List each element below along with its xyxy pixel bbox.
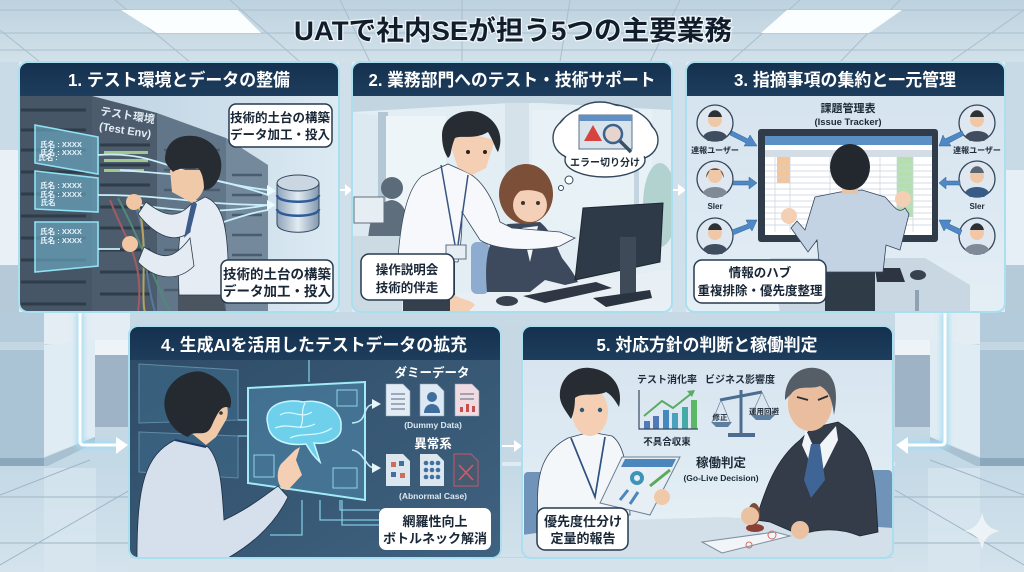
connector: arrow panel 4 to panel 5	[501, 440, 522, 452]
heading	[352, 62, 672, 96]
icon: database	[277, 175, 319, 232]
connector: arrow panel 1 to panel 4	[80, 312, 128, 454]
heading: 2. 業務部門へのテスト・技術サポート	[368, 70, 656, 90]
seated colleague	[471, 164, 578, 294]
go-live decision label: 稼働判定	[696, 455, 746, 470]
callout: 重複排除・優先度整理	[697, 283, 823, 298]
reporter labels: 連報ユーザー	[953, 145, 1001, 155]
server racks	[19, 96, 268, 312]
heading	[19, 62, 339, 96]
callout: 情報のハブ	[729, 265, 792, 280]
panel: 1 test environment and data preparation: 氏名 : XXXX	[40, 139, 82, 149]
label: test env	[100, 106, 155, 140]
issue tracker label: 課題管理表	[820, 101, 876, 115]
dummy data icons: ダミーデータ	[394, 365, 470, 380]
heading: 3. 指摘事項の集約と一元管理	[734, 70, 956, 90]
heading	[129, 326, 501, 360]
report	[600, 457, 680, 515]
panel: 5 response policy and go-live decision	[522, 326, 893, 558]
callout: 定量的報告	[550, 531, 616, 546]
holographic brain panel	[248, 382, 365, 500]
panel: 1 test environment and data preparation	[19, 62, 339, 312]
callout: ボトルネック解消	[383, 531, 487, 546]
icon: error window	[579, 115, 632, 152]
scale: business impact: 修正	[712, 412, 728, 422]
thought bubble: error triage: エラー切り分け	[570, 156, 640, 169]
panel: 1 test environment and data preparation: 氏名 : XXXX	[40, 189, 82, 199]
chart: test progress and defect convergence: テスト消化率	[637, 373, 697, 386]
decision document	[702, 531, 790, 553]
panel: 3 issue consolidation	[686, 62, 1005, 314]
callout: 操作説明会	[376, 262, 439, 277]
callout	[537, 508, 628, 550]
heading: 1. テスト環境とデータの整備	[68, 70, 290, 90]
executive figure with stamp	[741, 368, 878, 539]
panel: 1 test environment and data preparation: 氏名 :	[38, 152, 58, 162]
panel: 1 test environment and data preparation: 氏名 : XXXX	[40, 235, 82, 245]
code windows	[139, 364, 238, 478]
heading	[686, 62, 1005, 96]
panel: 2 test and technical support	[352, 62, 677, 316]
chart: test progress and defect convergence	[637, 373, 698, 448]
dummy data icons: (Dummy Data)	[404, 420, 462, 430]
go-live decision label: (Go-Live Decision)	[683, 473, 759, 483]
arrows to outputs	[352, 404, 375, 468]
icon: reporter avatars with arrows	[697, 105, 995, 254]
thought bubble: error triage	[553, 102, 658, 190]
heading: 5. 対応方針の判断と稼働判定	[596, 335, 818, 355]
connector: arrow panel 1 to panel 2	[339, 184, 352, 196]
issue tracker label	[815, 102, 882, 127]
callout: 網羅性向上	[402, 514, 468, 529]
abnormal case icons: 異常系	[414, 436, 452, 451]
panel: 1 test environment and data preparation: 氏名 : XXXX	[40, 226, 82, 236]
dummy data icons	[386, 365, 479, 430]
callout	[694, 260, 826, 303]
desk	[420, 270, 672, 312]
operator seen from behind	[781, 144, 911, 312]
analyst figure	[137, 371, 302, 558]
issue tracker label: (Issue Tracker)	[814, 117, 882, 128]
standing support engineer	[398, 111, 575, 315]
go-live decision label	[683, 455, 759, 483]
monitor: issue tracker spreadsheet	[758, 129, 938, 242]
callout: 優先度仕分け	[544, 514, 622, 529]
desk	[770, 258, 970, 314]
callout: データ加工・投入	[230, 127, 330, 142]
technician figure	[122, 136, 228, 312]
heading: 4. 生成AIを活用したテストデータの拡充	[161, 335, 467, 355]
connector: arrow panel 3 to panel 5	[896, 312, 945, 454]
background coworker	[353, 177, 404, 311]
reporter labels	[691, 145, 1001, 211]
scale: business impact: ビジネス影響度	[705, 373, 775, 386]
abnormal case icons	[386, 436, 478, 501]
connector: arrow panel 2 to panel 3	[672, 184, 686, 196]
panel: 4 generative AI test data	[129, 326, 501, 558]
panel: 1 test environment and data preparation: 氏名	[40, 197, 56, 207]
table	[522, 517, 893, 558]
reporter labels: SIer	[707, 202, 723, 211]
icon: sparkle watermark	[964, 512, 1000, 550]
abnormal case icons: (Abnormal Case)	[399, 491, 467, 501]
scale: business impact: 運用回避	[749, 406, 779, 416]
circuit lines	[238, 360, 380, 535]
label: test env: (Test Env)	[98, 121, 152, 141]
panel: 1 test environment and data preparation: 氏名 : XXXX	[40, 147, 82, 157]
callout: 技術的土台の構築	[230, 110, 330, 125]
callout: 技術的土台の構築	[223, 266, 331, 282]
callout: データ加工・投入	[223, 283, 331, 299]
label: test env: テスト環境	[99, 105, 156, 126]
heading	[522, 326, 893, 360]
callout	[361, 254, 454, 300]
chairs	[524, 470, 892, 542]
analyst figure with report	[537, 368, 630, 515]
callout	[221, 260, 333, 303]
keyboard and mouse	[496, 282, 612, 306]
reporter labels: SIer	[969, 202, 985, 211]
callout: 技術的伴走	[376, 280, 439, 295]
data flow lines	[98, 154, 268, 249]
chart: test progress and defect convergence: 不具合収束	[643, 436, 691, 448]
panel: 1 test environment and data preparation: 氏名 : XXXX	[40, 180, 82, 190]
callout	[379, 508, 491, 550]
scale: business impact	[705, 373, 779, 435]
title: UATで社内SEが担う5つの主要業務	[294, 15, 732, 46]
icon: monitor	[575, 203, 663, 307]
office windows	[353, 96, 671, 247]
data cards	[35, 125, 98, 272]
reporter labels: 連報ユーザー	[691, 145, 739, 155]
callout	[229, 104, 332, 147]
cables	[110, 196, 170, 312]
